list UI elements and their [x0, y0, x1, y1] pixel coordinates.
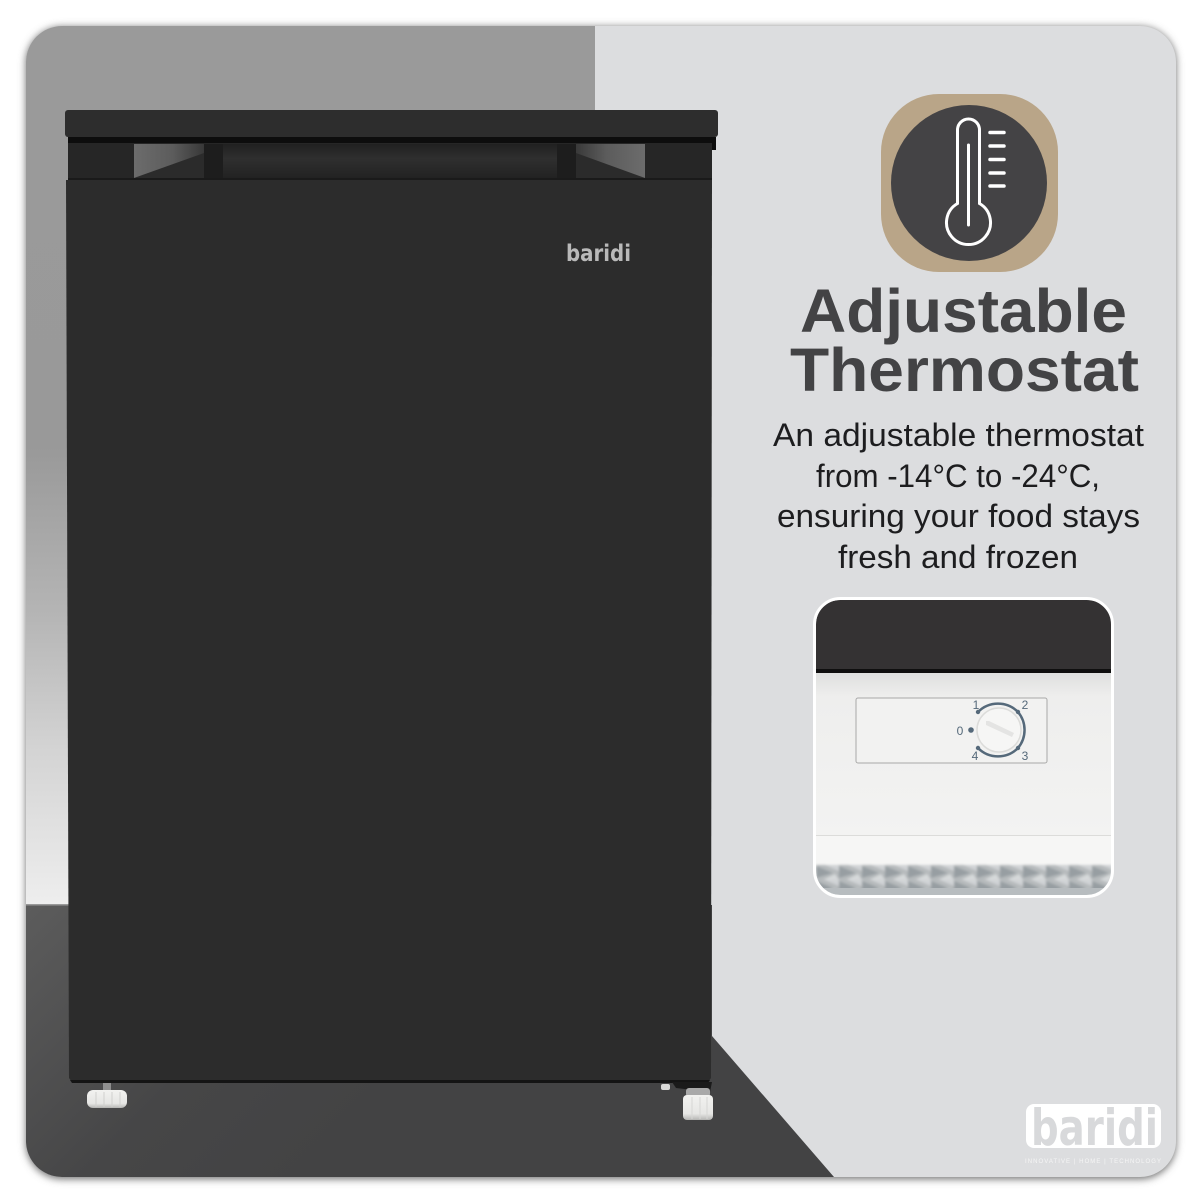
dark floor — [26, 905, 834, 1177]
left foot — [87, 1083, 127, 1108]
freezer lid — [65, 110, 718, 137]
logo: white plate — [1026, 1104, 1161, 1148]
heading: Adjustable — [800, 277, 1127, 345]
icon: thermometer badge — [881, 94, 1058, 272]
grey wall — [26, 26, 595, 905]
description text: from -14°C to -24°C, — [816, 458, 1100, 494]
gap under lid — [68, 137, 716, 150]
freezer door — [66, 180, 712, 1082]
photo: dial: 4 — [972, 749, 979, 763]
logo: wordmark: baridi — [1031, 1099, 1158, 1157]
photo: white interior — [816, 682, 1111, 872]
icon: dark circle — [891, 105, 1047, 261]
brand logo — [1025, 1099, 1161, 1165]
photo: dial — [957, 698, 1029, 763]
photo: evaporator grille — [816, 864, 1111, 888]
heading — [790, 277, 1139, 404]
logo: tagline: INNOVATIVE | HOME | TECHNOLOGY — [1025, 1159, 1161, 1165]
door bottom edge — [70, 1080, 710, 1083]
door brand logo: baridi — [566, 241, 631, 267]
description text: ensuring your food stays — [777, 498, 1140, 534]
description text: An adjustable thermostat — [773, 417, 1144, 453]
photo: control panel — [856, 698, 1047, 763]
freezer product — [65, 110, 718, 1120]
photo: dial: 3 — [1022, 749, 1029, 763]
right rear support — [672, 1082, 712, 1092]
photo: white frame — [814, 598, 1112, 896]
photo: dial: 1 — [973, 698, 980, 712]
photo: dial: 2 — [1022, 698, 1029, 712]
icon: thermometer — [946, 119, 1004, 245]
icon: tan rounded square — [881, 94, 1058, 272]
handle recess — [68, 143, 712, 180]
photo: dark lid — [816, 600, 1112, 670]
inset photo: thermostat dial — [814, 598, 1112, 896]
description text — [773, 417, 1144, 575]
right foot — [683, 1088, 713, 1120]
heading: Thermostat — [790, 336, 1139, 404]
photo: shelf lip — [816, 835, 1112, 865]
photo: dial: 0 — [957, 724, 964, 738]
description text: fresh and frozen — [838, 539, 1078, 575]
small bottom peg — [661, 1084, 670, 1090]
